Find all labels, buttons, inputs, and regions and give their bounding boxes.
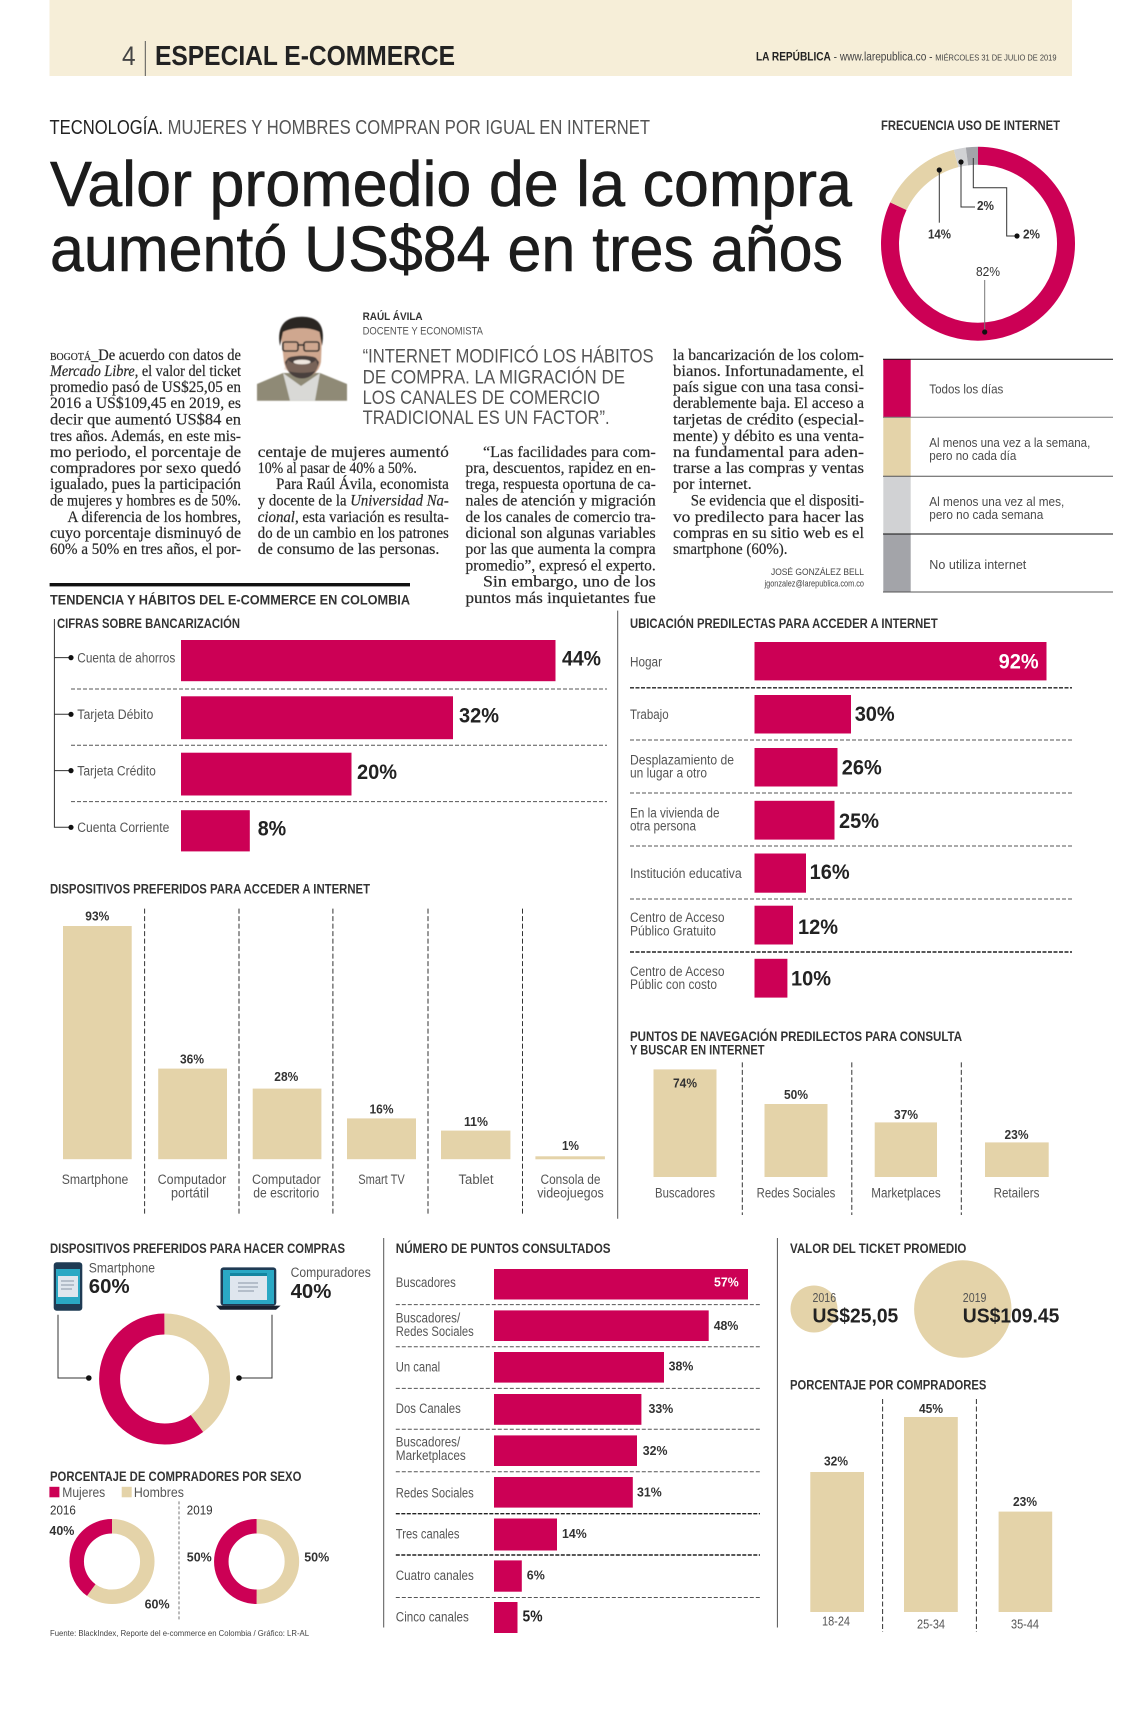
panel: dispositivos para acceder a internet (50, 882, 605, 1215)
bar chart: 44% (562, 648, 601, 671)
donut values: 40% (49, 1524, 74, 1538)
bar chart: Buscadores/ (396, 1311, 460, 1326)
article text column 1: tres años. Además, en este mis- (50, 428, 241, 445)
article text column 3: nales de atención y migración (466, 493, 656, 510)
panel: valor del ticket promedio (790, 1241, 1059, 1358)
expert role: DOCENTE Y ECONOMISTA (363, 326, 484, 338)
article text column 2 (258, 444, 449, 558)
article text column 3: Sin embargo, uno de los (483, 574, 656, 591)
bubble 2019 (914, 1260, 1012, 1358)
bar chart: 92% (999, 651, 1039, 674)
panel: dispositivos para hacer compras (50, 1241, 371, 1434)
column chart: Tablet (458, 1172, 494, 1187)
bar chart: 32% (643, 1444, 668, 1458)
bar chart: 8% (258, 818, 287, 840)
column chart: Retailers (994, 1186, 1040, 1201)
article text column 3: “Las facilidades para com- (483, 444, 656, 461)
legend: Al menos una vez al mes, (929, 494, 1064, 509)
article text column 1: igualado, pues la participación (50, 476, 241, 493)
column chart: Consola de (540, 1172, 600, 1187)
byline (764, 567, 864, 589)
panel: cifras sobre bancarización (54, 616, 607, 851)
column chart: 74% (673, 1076, 697, 1090)
photo: Raúl Ávila (257, 317, 347, 401)
icon: laptop (216, 1267, 281, 1310)
column chart: de escritorio (253, 1186, 319, 1201)
column chart: 18-24 (822, 1614, 850, 1629)
heading: DISPOSITIVOS PREFERIDOS PARA ACCEDER A INTERNET (50, 882, 371, 896)
donut values: 50% (187, 1551, 212, 1565)
page header band (50, 0, 1072, 76)
bar chart: 16% (810, 861, 850, 884)
icon: smartphone (54, 1262, 82, 1311)
article text column 3: por las que aumenta la compra (466, 541, 656, 558)
value 2016 (812, 1290, 898, 1328)
title: aumentó US$84 en tres años (50, 213, 843, 285)
column chart: 50% (784, 1088, 808, 1102)
column chart: Smart TV (358, 1172, 405, 1187)
column chart (810, 1402, 1052, 1632)
bar chart: Marketplaces (396, 1448, 466, 1463)
panel: puntos de navegación (630, 1029, 1049, 1215)
bar chart: Cinco canales (396, 1610, 469, 1625)
article text column 2: Para Raúl Ávila, economista (276, 476, 449, 493)
article text column 1: BOGOTÁ_De acuerdo con datos de (50, 347, 241, 364)
bar chart: 14% (562, 1527, 587, 1541)
bar chart: 10% (791, 967, 831, 990)
article text column 4: Se evidencia que el dispositi- (691, 493, 864, 510)
section name: ESPECIAL E-COMMERCE (155, 40, 455, 71)
column chart: 36% (180, 1052, 204, 1066)
article text column 1: cuyo porcentaje disminuyó de (50, 525, 241, 542)
byline: jgonzalez@larepublica.com.co (764, 579, 864, 589)
bar chart: 20% (357, 761, 397, 784)
panel: compradores por sexo: 2016 (50, 1503, 76, 1518)
article text column 1: promedio pasó de US$25,05 en (50, 379, 241, 396)
legend: pero no cada semana (929, 507, 1044, 522)
donut values: 82% (976, 265, 1000, 279)
article text column 4: por internet. (673, 476, 752, 493)
bar chart: Centro de Acceso (630, 910, 724, 925)
article text column 4: bianos. Infortunadamente, el (673, 363, 864, 380)
column chart: Smartphone (62, 1172, 128, 1187)
article text column 1: A diferencia de los hombres, (68, 509, 241, 526)
article text column 4: tarjetas de crédito (especial- (673, 412, 864, 429)
source note: Fuente: BlackIndex, Reporte del e-commerce en Colombia / Gráfico: LR-AL (50, 1628, 309, 1638)
article text column 2: de consumo de las personas. (258, 541, 439, 558)
article text column 4: smartphone (60%). (673, 541, 788, 558)
section heading (50, 583, 410, 608)
legend (49, 1485, 184, 1500)
article text column 4: vo predilecto para hacer las (673, 509, 864, 526)
article text column 2: centaje de mujeres aumentó (258, 444, 449, 461)
panel: frecuencia uso de internet (881, 118, 1113, 592)
bar chart: un lugar a otro (630, 766, 707, 780)
column chart: 1% (562, 1139, 579, 1153)
column chart: Marketplaces (871, 1186, 941, 1201)
bar chart: Público Gratuito (630, 924, 716, 938)
bar chart: 32% (459, 704, 499, 727)
smartphone value: 60% (89, 1276, 130, 1298)
heading: Y BUSCAR EN INTERNET (630, 1043, 765, 1058)
bar chart: Tarjeta Débito (77, 707, 153, 722)
value 2019 (963, 1290, 1059, 1328)
column chart (654, 1069, 1049, 1201)
page number: 4 (122, 41, 136, 71)
article text column 3: trega, respuesta oportuna de ca- (466, 476, 656, 493)
bar chart: Trabajo (630, 707, 669, 722)
computers value: 40% (291, 1281, 332, 1303)
panel: número de puntos consultados (396, 1241, 760, 1633)
article text column 3: de los canales de comercio tra- (466, 509, 656, 526)
legend: Mujeres (62, 1485, 105, 1500)
title (50, 148, 852, 285)
donut values: 14% (928, 228, 951, 242)
bar chart: Cuatro canales (396, 1568, 474, 1583)
bar chart: Un canal (396, 1359, 440, 1374)
bar chart: Hogar (630, 654, 662, 670)
bar chart: Cuenta de ahorros (77, 650, 176, 666)
article text column 4: país sigue con una tasa consi- (673, 379, 864, 396)
article text column 3: dicional son algunas variables (466, 525, 656, 542)
bar chart: 48% (714, 1319, 738, 1333)
donut values: 60% (145, 1598, 170, 1612)
article text column 2: 10% al pasar de 40% a 50%. (258, 460, 417, 477)
column chart: 45% (919, 1402, 943, 1416)
bar chart: 30% (855, 703, 895, 726)
legend: Al menos una vez a la semana, (929, 435, 1090, 450)
bar chart: Desplazamiento de (630, 752, 734, 768)
value 2019: 2019 (963, 1290, 986, 1305)
bar chart: Redes Sociales (396, 1324, 474, 1339)
bar chart: 25% (839, 810, 879, 833)
bar chart: 33% (648, 1402, 673, 1416)
column chart: videojuegos (537, 1186, 604, 1201)
bar chart: otra persona (630, 819, 696, 834)
donut values: 2% (1023, 228, 1040, 242)
donut 2016 (77, 1526, 147, 1597)
legend: pero no cada día (929, 448, 1017, 463)
computers value: Compuradores (291, 1265, 371, 1280)
expert name: RAÚL ÁVILA (363, 310, 423, 323)
column chart (62, 909, 605, 1201)
article text column 3 (466, 444, 656, 607)
heading: UBICACIÓN PREDILECTAS PARA ACCEDER A INTERNET (630, 616, 938, 631)
bar chart: Cuenta Corriente (77, 820, 169, 835)
panel: ubicación predilecta (630, 616, 1072, 998)
column chart: 37% (894, 1108, 918, 1122)
publication line: LA REPÚBLICA - www.larepublica.co - MIÉRCOLES 31 DE JULIO DE 2019 (756, 50, 1057, 64)
article text column 4: na fundamental para aden- (673, 444, 864, 461)
article text column 2: do de un cambio en los patrones (258, 525, 449, 542)
column chart: 28% (274, 1070, 298, 1084)
heading: NÚMERO DE PUNTOS CONSULTADOS (396, 1241, 611, 1256)
bar chart: 31% (637, 1486, 662, 1500)
section heading: TENDENCIA Y HÁBITOS DEL E-COMMERCE EN COLOMBIA (50, 592, 410, 608)
kicker: TECNOLOGÍA. MUJERES Y HOMBRES COMPRAN POR IGUAL EN INTERNET (50, 116, 650, 139)
legend: Hombres (134, 1485, 184, 1500)
article text column 1: decir que aumentó US$84 en (50, 412, 241, 429)
heading: CIFRAS SOBRE BANCARIZACIÓN (57, 616, 240, 631)
heading: FRECUENCIA USO DE INTERNET (881, 118, 1061, 133)
bar chart: Tarjeta Crédito (77, 764, 156, 778)
article text column 4: la bancarización de los colom- (673, 347, 864, 364)
bar chart: 5% (522, 1609, 542, 1626)
bar chart: Centro de Acceso (630, 964, 724, 979)
heading: PORCENTAJE POR COMPRADORES (790, 1378, 986, 1393)
pull quote: DE COMPRA. LA MIGRACIÓN DE (363, 366, 625, 388)
heading: PUNTOS DE NAVEGACIÓN PREDILECTOS PARA CONSULTA (630, 1029, 962, 1044)
pull quote: “INTERNET MODIFICÓ LOS HÁBITOS (363, 346, 654, 368)
bar chart: Dos Canales (396, 1401, 461, 1416)
bar chart (77, 640, 601, 851)
bar chart: En la vivienda de (630, 806, 720, 820)
title: Valor promedio de la compra (50, 148, 852, 220)
article text column 1: compradores por sexo quedó (50, 460, 241, 477)
column chart: 11% (464, 1115, 488, 1129)
panel: compradores por sexo: 2019 (187, 1503, 213, 1518)
article text column 1: 2016 a US$109,45 en 2019, es (50, 395, 241, 412)
bar chart: 12% (798, 916, 838, 939)
bar chart: Redes Sociales (396, 1485, 474, 1500)
value 2016: US$25,05 (812, 1306, 898, 1328)
pull quote: LOS CANALES DE COMERCIO (363, 388, 600, 409)
bar chart: 26% (842, 756, 882, 779)
pull quote (363, 346, 654, 429)
article text column 4: derablemente baja. El acceso a (673, 395, 864, 412)
pull quote: TRADICIONAL ES UN FACTOR”. (363, 408, 610, 429)
bar chart: Públic con costo (630, 977, 717, 992)
heading: DISPOSITIVOS PREFERIDOS PARA HACER COMPRAS (50, 1241, 345, 1256)
donut chart (890, 156, 1066, 332)
bar chart (630, 642, 1046, 998)
bar chart: Buscadores/ (396, 1434, 460, 1449)
column chart: 23% (1004, 1128, 1028, 1142)
article text column 1: de mujeres y hombres es de 50%. (50, 493, 241, 510)
smartphone value: Smartphone (89, 1260, 155, 1276)
column chart: 23% (1013, 1495, 1037, 1509)
column chart: portátil (171, 1186, 209, 1201)
bar chart: 38% (669, 1359, 693, 1373)
legend: No utiliza internet (929, 557, 1027, 572)
article text column 3: promedio”, expresó el experto. (466, 557, 656, 574)
column chart: Redes Sociales (757, 1186, 836, 1201)
column chart: 16% (370, 1102, 394, 1116)
legend: Todos los días (929, 381, 1004, 396)
article text column 2: y docente de la Universidad Na- (258, 493, 449, 510)
leader lines (939, 158, 1017, 332)
article text column 3: pra, descuentos, rapidez en en- (466, 460, 656, 477)
label connector tree (54, 619, 74, 830)
article text column 3: puntos más inquietantes fue (466, 590, 656, 607)
value 2016: 2016 (812, 1290, 836, 1305)
leader dots (937, 159, 1020, 335)
donut values: 2% (977, 199, 994, 213)
column chart: Computador (252, 1172, 321, 1187)
bar chart: Buscadores (396, 1275, 456, 1290)
article text column 4 (673, 347, 864, 558)
smartphone value (89, 1260, 155, 1298)
heading (630, 1029, 962, 1058)
bar chart (396, 1269, 748, 1633)
heading: PORCENTAJE DE COMPRADORES POR SEXO (50, 1469, 301, 1484)
article text column 4: compras en su sitio web es el (673, 525, 864, 542)
column chart: Computador (158, 1172, 227, 1187)
column chart: 25-34 (917, 1616, 945, 1632)
article text column 4: trarse a las compras y ventas (673, 460, 864, 477)
article text column 1: Mercado Libre, el valor del ticket (49, 363, 242, 380)
article text column 1 (49, 347, 242, 558)
column chart: 35-44 (1011, 1616, 1039, 1632)
bar chart: 6% (527, 1568, 545, 1582)
column chart: Buscadores (655, 1186, 715, 1201)
byline: JOSÉ GONZÁLEZ BELL (771, 567, 864, 577)
panel: porcentaje por compradores (790, 1378, 1052, 1632)
bubble 2016 (790, 1286, 838, 1332)
donut 2019 (221, 1526, 292, 1597)
bar chart: Tres canales (396, 1527, 460, 1542)
article text column 4: mente) y débito es una venta- (673, 428, 864, 445)
article text column 1: mo periodo, el porcentaje de (50, 444, 241, 461)
donut values (928, 199, 1040, 279)
article text column 2: cional, esta variación es resulta- (258, 509, 449, 526)
computers value (291, 1265, 371, 1303)
article text column 1: 60% a 50% en tres años, el por- (50, 541, 241, 558)
donut values: 50% (304, 1551, 329, 1565)
donut chart (110, 1324, 220, 1434)
legend (883, 359, 1113, 592)
column chart: 32% (824, 1455, 848, 1469)
bar chart: 57% (714, 1276, 739, 1290)
column chart: 93% (85, 909, 109, 923)
bar chart: Institución educativa (630, 866, 742, 881)
heading: VALOR DEL TICKET PROMEDIO (790, 1241, 966, 1256)
value 2019: US$109.45 (963, 1306, 1059, 1328)
leader lines (58, 1315, 272, 1381)
panel: compradores por sexo (49, 1469, 329, 1621)
donut values (49, 1524, 329, 1612)
